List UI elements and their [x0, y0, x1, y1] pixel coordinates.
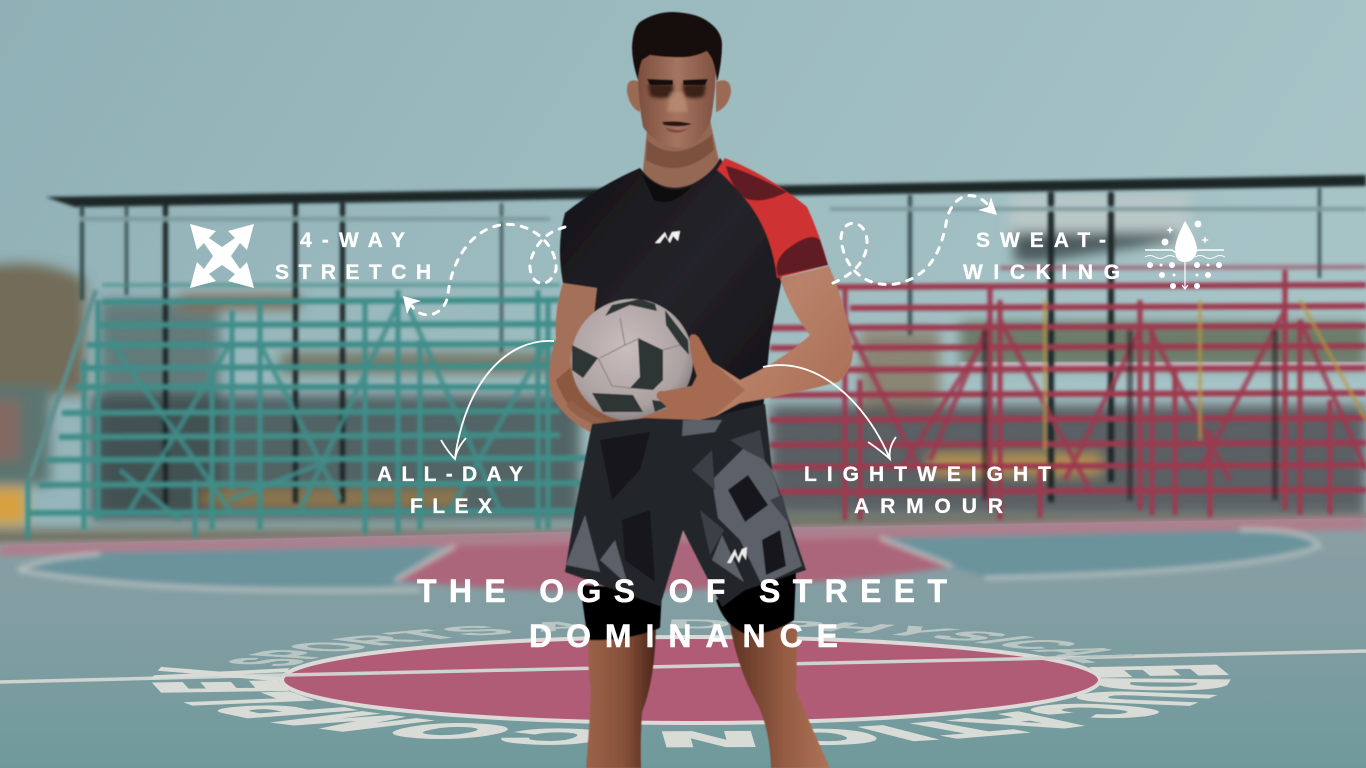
label: lightweight armour: LIGHTWEIGHT	[804, 463, 1051, 486]
camouflage shorts	[565, 404, 806, 607]
curved arrow to lightweight armour	[763, 365, 896, 459]
chest logo	[655, 231, 680, 243]
eye sockets	[648, 84, 706, 98]
person: athlete holding football	[549, 12, 853, 768]
label: all-day flex: ALL-DAY	[377, 463, 523, 486]
right arm	[636, 266, 853, 428]
left leg	[586, 625, 656, 768]
right compression short	[716, 570, 796, 634]
ball panels	[572, 299, 689, 412]
court lettering	[152, 619, 1231, 748]
court lettering: EDUCATION COMPLEX	[152, 664, 1231, 748]
label: 4-way stretch: 4-WAY	[300, 229, 405, 252]
face	[638, 45, 717, 148]
background: grandstand roof and posts	[46, 175, 1366, 505]
court markings: paint zones and lines	[0, 516, 1366, 592]
background: sky	[0, 0, 1366, 530]
football	[571, 299, 693, 421]
mouth	[662, 121, 692, 126]
label: 4-way stretch	[275, 229, 431, 284]
label: 4-way stretch: STRETCH	[275, 261, 431, 284]
red sleeve	[717, 158, 828, 278]
ears	[627, 80, 731, 112]
right leg	[730, 625, 830, 768]
t-shirt collar shadow	[642, 174, 692, 202]
left compression short	[580, 585, 662, 640]
icon: sweat wicking fabric	[1145, 220, 1225, 289]
bleachers: teal stand	[28, 285, 590, 540]
court lettering: SPORTS AND PHYSICAL	[229, 619, 1136, 666]
label: all-day flex: FLEX	[410, 495, 492, 518]
hair	[632, 12, 722, 82]
court floor	[0, 518, 1366, 768]
title: DOMINANCE	[529, 618, 838, 654]
title: THE OGS OF STREET	[417, 573, 947, 609]
background: distant trees and field	[0, 195, 1366, 544]
dashed arrow to sweat-wicking	[833, 196, 997, 284]
background: pale strip behind red stand	[960, 362, 1366, 371]
hand over ball	[636, 334, 745, 428]
dashed arrow to 4-way stretch	[403, 224, 565, 315]
feature: all-day flex	[377, 341, 554, 518]
label: lightweight armour: ARMOUR	[854, 495, 1003, 518]
label: sweat-wicking	[963, 229, 1120, 284]
sleeve dark marks	[726, 166, 828, 276]
neck	[642, 120, 722, 205]
t-shirt body	[560, 158, 782, 421]
left arm	[549, 283, 625, 432]
label: lightweight armour	[804, 463, 1051, 518]
title	[417, 573, 947, 654]
camo pattern	[566, 420, 802, 585]
left hand	[556, 368, 620, 426]
icon: four-way arrows	[190, 224, 254, 288]
feature: sweat-wicking	[833, 196, 1225, 289]
brows	[647, 79, 708, 85]
curved arrow to all-day flex	[441, 341, 554, 459]
shorts logo	[727, 547, 747, 563]
nose highlight	[667, 92, 688, 112]
label: sweat-wicking: SWEAT-	[976, 229, 1106, 252]
feature: lightweight armour	[763, 365, 1051, 518]
label: all-day flex	[377, 463, 523, 518]
bleachers: red stand	[770, 267, 1366, 520]
court centre circle and lettering	[0, 619, 1366, 748]
label: sweat-wicking: WICKING	[963, 261, 1120, 284]
feature: 4-way stretch	[190, 224, 565, 315]
